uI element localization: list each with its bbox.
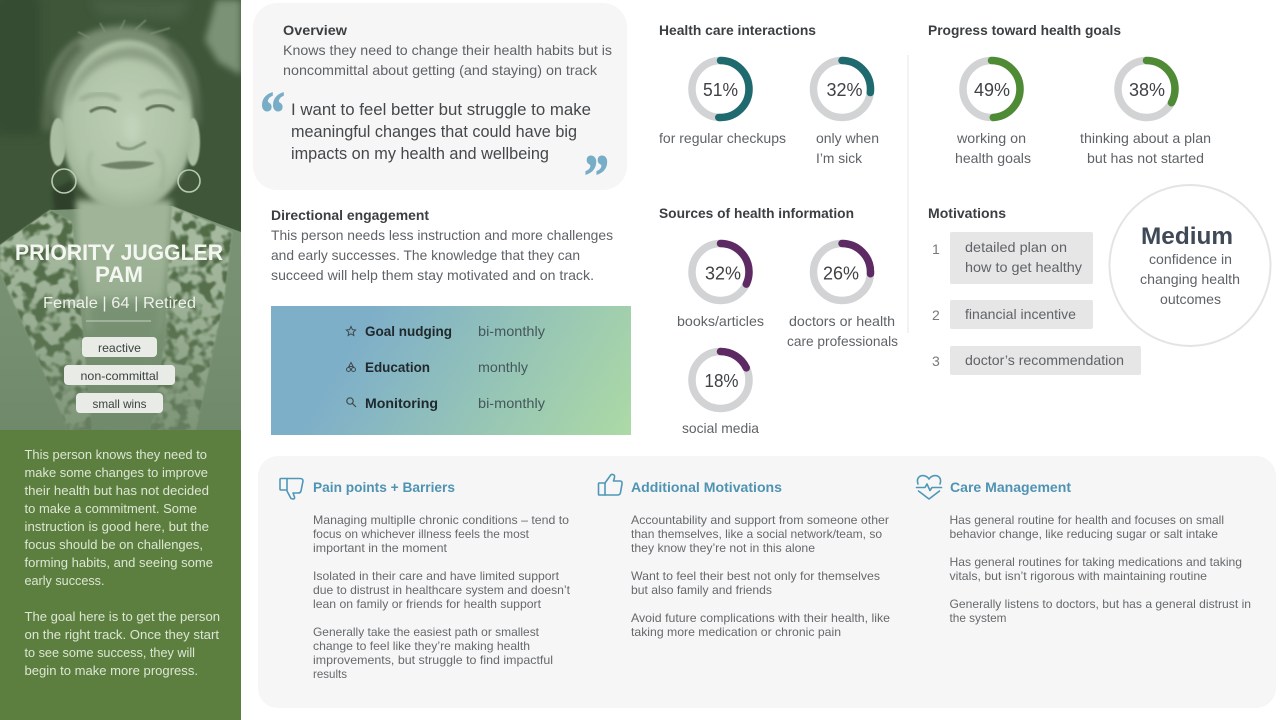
column: pain points: Pain points + Barriers [313, 479, 455, 495]
panel: persona summary: their health but has not decided [24, 483, 209, 498]
motivations text: Avoid future complications with their health, like [631, 611, 890, 625]
motivation 2: 2 [932, 307, 940, 323]
panel: persona summary: forming habits, and seeing some [24, 555, 213, 570]
callout: confidence circle [1110, 185, 1270, 346]
panel: engagement cadence: monthly [478, 359, 528, 375]
face [61, 40, 193, 212]
care management text: the system [950, 611, 1006, 625]
blouse base [0, 206, 241, 430]
panel: health care interactions: I’m sick [816, 150, 863, 166]
care management text: Has general routines for taking medications and taking [950, 555, 1242, 569]
callout: confidence circle: outcomes [1160, 291, 1221, 307]
motivations text: Want to feel their best not only for themselves [631, 569, 880, 583]
pain point text: Isolated in their care and have limited support [313, 569, 560, 583]
persona tags: small wins [92, 397, 146, 411]
panel: engagement cadence: Monitoring [365, 395, 438, 411]
icon: thumbs down [280, 478, 303, 499]
pain point text: focus on whichever illness feels the most [313, 527, 530, 541]
panel: sources of health information: care professionals [787, 333, 898, 349]
persona name [15, 240, 223, 287]
callout: confidence circle: changing health [1140, 271, 1240, 287]
hair mass [45, 22, 198, 122]
panel: sources of health information: doctors or health [789, 313, 895, 329]
panel: engagement cadence: bi-monthly [478, 323, 545, 339]
quote text: I want to feel better but struggle to make [291, 101, 591, 119]
pain point text: improvements, but struggle to find impactful [313, 653, 553, 667]
overview text: Knows they need to change their health habits but is [283, 42, 612, 58]
motivation 2 [932, 300, 1093, 329]
icon: magnifier [347, 398, 356, 407]
panel: health care interactions [659, 22, 879, 166]
panel: sources of health information: social media [682, 420, 759, 436]
donut 18%: 18% [704, 371, 738, 391]
column: care management [916, 476, 1251, 625]
persona name: PRIORITY JUGGLER [15, 240, 223, 265]
pain point text: change to feel like they’re making health [313, 639, 530, 653]
persona tags: non-committal [80, 369, 158, 383]
care management text [950, 513, 1251, 625]
quote text [291, 101, 591, 163]
quote text: impacts on my health and wellbeing [291, 145, 549, 163]
pain point text: important in the moment [313, 541, 448, 555]
portrait photo panel [0, 0, 241, 430]
panel: motivations [928, 205, 1141, 375]
care management text: behavior change, like reducing sugar or salt intake [950, 527, 1218, 541]
panel: progress toward health goals: but has not started [1087, 150, 1204, 166]
panel: persona summary: to see some success, they will [24, 645, 195, 660]
donut 32% checkups: 32% [826, 80, 862, 100]
pain point text: results [313, 667, 347, 681]
panel: persona summary: focus should be on challenges, [24, 537, 203, 552]
pain point text: due to distrust in healthcare system and doesn’t [313, 583, 571, 597]
directional engagement text: and early successes. The knowledge that they can [271, 247, 580, 263]
panel: progress toward health goals: working on [956, 130, 1026, 146]
panel: persona summary [0, 430, 241, 720]
panel: progress toward health goals: Progress toward health goals [928, 22, 1121, 38]
pain point text: Managing multiplle chronic conditions – tend to [313, 513, 569, 527]
icon: opening quote: “ [260, 80, 285, 146]
motivation 1 [932, 232, 1093, 284]
motivation 1: 1 [932, 241, 940, 257]
motivations text: Accountability and support from someone other [631, 513, 889, 527]
motivations text: taking more medication or chronic pain [631, 625, 841, 639]
panel: sources of health information [659, 205, 898, 436]
donut 26%: 26% [823, 264, 859, 284]
donut 51%: 51% [703, 80, 738, 100]
pain point text: Generally take the easiest path or smallest [313, 625, 540, 639]
donut 32% checkups [814, 60, 870, 118]
motivation 3 [932, 346, 1141, 375]
panel: persona summary: This person knows they need to [24, 447, 207, 462]
panel: health care interactions: only when [816, 130, 879, 146]
donut 32% books [692, 244, 749, 300]
donut 38% [1118, 60, 1175, 118]
motivation 1: how to get healthy [965, 259, 1082, 275]
directional engagement text: This person needs less instruction and more challenges [271, 227, 613, 243]
icon: thumbs up [598, 474, 622, 495]
donut 18% [692, 352, 749, 408]
persona demographics: Female | 64 | Retired [43, 295, 196, 312]
panel: overview and quote [253, 3, 627, 209]
directional engagement text: succeed will help them stay motivated and on track. [271, 267, 594, 283]
motivation 2: financial incentive [965, 306, 1076, 322]
panel: progress toward health goals [928, 22, 1211, 166]
panel: engagement cadence [271, 306, 631, 435]
callout: confidence circle: Medium [1141, 223, 1233, 250]
panel: bottom details [258, 456, 1276, 708]
icon: heart with pulse [916, 476, 942, 499]
lower fade [0, 295, 241, 430]
column: pain points [280, 478, 571, 681]
panel: persona summary: to make a commitment. Some [24, 501, 197, 516]
panel: progress toward health goals: health goals [955, 150, 1031, 166]
panel: persona summary: begin to make more progress. [24, 663, 198, 678]
collars [0, 206, 232, 430]
panel: engagement cadence: Goal nudging [365, 323, 452, 339]
panel: engagement cadence: bi-monthly [478, 395, 545, 411]
care management text: vitals, but isn’t rigorous with maintaining routine [950, 569, 1207, 583]
panel: persona summary: early success. [24, 573, 104, 588]
overview heading: Overview [283, 22, 347, 38]
persona name: PAM [95, 262, 143, 287]
icon: shapes [346, 362, 356, 372]
braid shadow [52, 180, 76, 210]
panel: sources of health information: books/articles [677, 313, 764, 329]
icon: closing quote: ” [584, 143, 609, 209]
motivations text: but also family and friends [631, 583, 772, 597]
care management text: Has general routine for health and focuses on small [950, 513, 1224, 527]
ears [50, 118, 66, 166]
directional engagement text: Directional engagement [271, 207, 429, 223]
motivations text: they know they’re not in this alone [631, 541, 815, 555]
donut 38%: 38% [1129, 80, 1165, 100]
panel: health care interactions: Health care interactions [659, 22, 816, 38]
panel: progress toward health goals: thinking about a plan [1080, 130, 1211, 146]
panel: persona summary: on the right track. Once they start [24, 627, 219, 642]
brows and eyes [80, 94, 120, 100]
overview text: noncommittal about getting (and staying) on track [283, 62, 598, 78]
motivations text [631, 513, 890, 639]
donut 49% [963, 60, 1020, 118]
persona tags [64, 337, 175, 413]
donut 49%: 49% [974, 80, 1010, 100]
panel: persona summary: instruction is good here, but the [24, 519, 209, 534]
pain point text [313, 513, 571, 681]
mouth and cheek lines [100, 161, 155, 169]
nose [118, 142, 146, 149]
panel: sources of health information: Sources of health information [659, 205, 854, 221]
directional engagement text [271, 207, 613, 283]
column: additional motivations [598, 474, 890, 639]
panel: persona summary: make some changes to improve [24, 465, 208, 480]
motivation 3: 3 [932, 353, 940, 369]
care management text: Generally listens to doctors, but has a general distrust in [950, 597, 1251, 611]
panel: persona summary: The goal here is to get the person [24, 609, 220, 624]
quote text: meaningful changes that could have big [291, 123, 577, 141]
persona tags: reactive [98, 341, 141, 355]
earrings [52, 169, 76, 193]
column: additional motivations: Additional Motivations [631, 479, 782, 495]
motivation 3: doctor’s recommendation [965, 352, 1124, 368]
neck and chest [76, 200, 172, 345]
donut 32% books: 32% [705, 264, 741, 284]
pain point text: lean on family or friends for health support [313, 597, 542, 611]
overview text [283, 42, 612, 78]
column: care management: Care Management [950, 479, 1071, 495]
panel: health care interactions: for regular checkups [659, 130, 786, 146]
icon: star [346, 326, 356, 336]
callout: confidence circle: confidence in [1149, 251, 1232, 267]
donut 26% [814, 244, 870, 300]
motivations text: than themselves, like a social network/team, so [631, 527, 882, 541]
panel: motivations: Motivations [928, 205, 1006, 221]
donut 51% [692, 60, 749, 118]
motivation 1: detailed plan on [965, 239, 1067, 255]
panel: engagement cadence: Education [365, 359, 430, 375]
